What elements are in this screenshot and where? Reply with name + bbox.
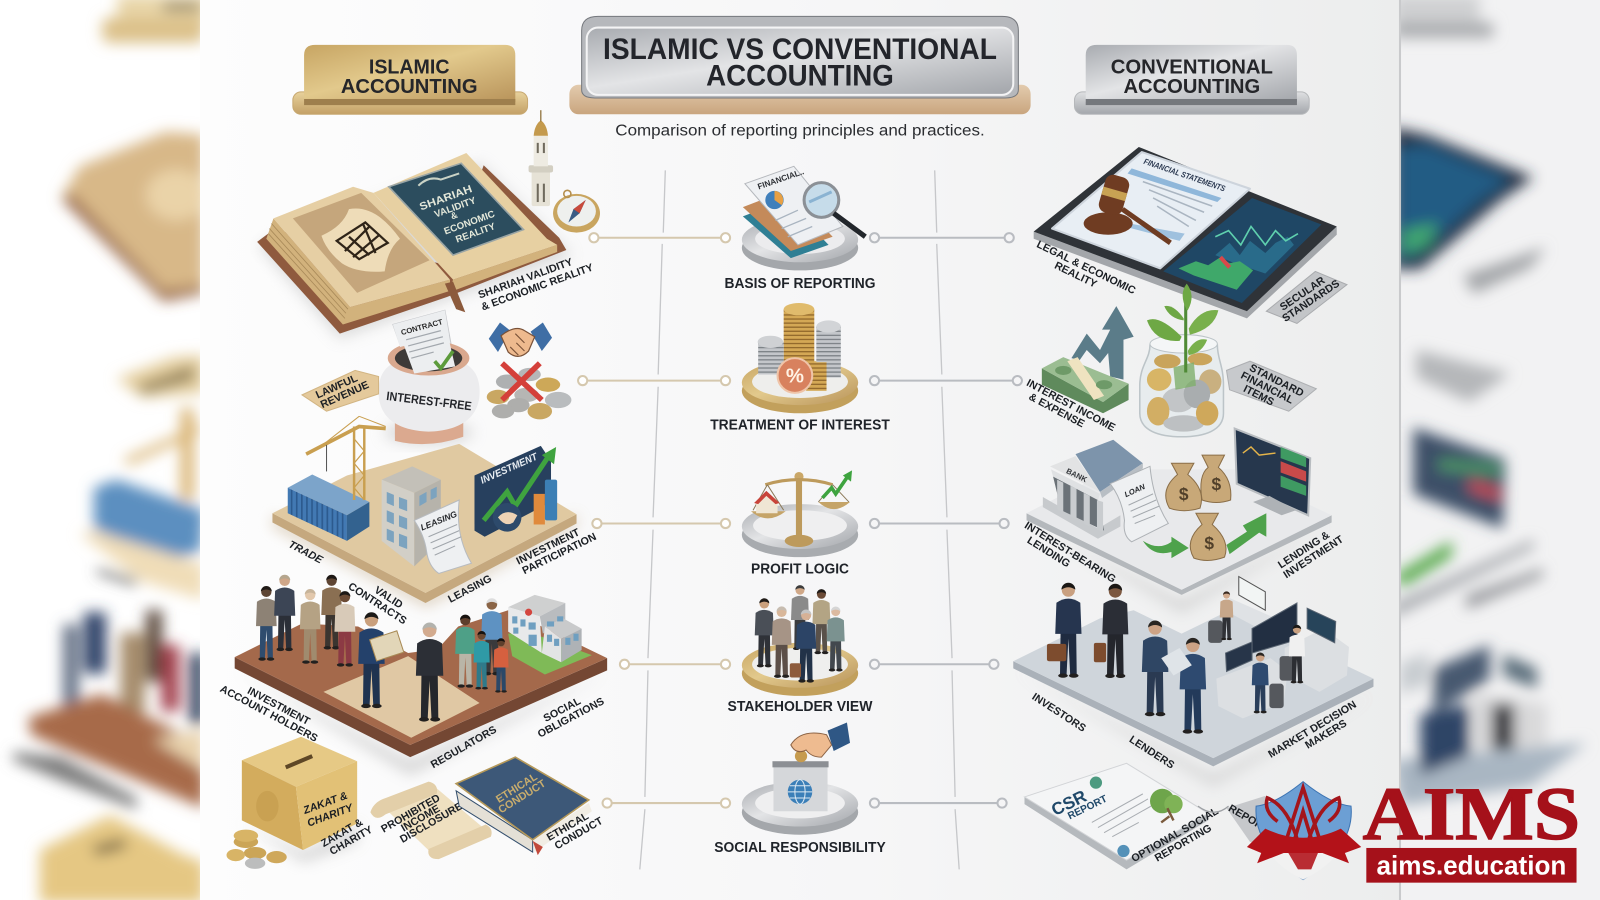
tag: secular standards [1266,269,1347,325]
panel: stakeholders wooden platform [235,575,607,776]
labels: investors row: MARKET DECISION [1266,698,1359,761]
tag: optional report tag: REPORT [1226,802,1271,835]
label: optional social reporting: OPTIONAL SOCIAL [1129,805,1221,865]
label: Shariah validity: & ECONOMIC REALITY [480,262,595,313]
panel: bank lending platform [1027,429,1332,612]
icon: zakat and charity box: ZAKAT & [301,790,349,817]
labels: stakeholder row: ACCOUNT HOLDERS [218,683,320,745]
connector: row 4 right [870,660,998,669]
logo: web address banner: aims.education [1377,850,1566,880]
icon: shipping container [288,474,369,541]
panel: bank lending platform: $ [1212,474,1222,494]
tag: lawful revenue [302,369,379,411]
tag: lawful revenue: LAWFUL [314,372,360,401]
icon: bank building: BANK [1065,466,1089,484]
icon: leasing contract [414,500,471,573]
label: ethical conduct: ETHICAL [545,810,591,844]
tag: standard financial items: FINANCIAL [1239,370,1296,407]
panel: investors and market desks platform [1013,577,1373,786]
labels: lending row: INTEREST-BEARING [1022,520,1118,586]
icon: seedling in coin jar [1140,284,1223,437]
icon: loan scroll: LOAN [1123,482,1147,499]
label: social responsibility: SOCIAL RESPONSIBILITY [714,840,886,856]
connector: row 1 right [870,233,1014,242]
panel: trade and leasing platform [272,416,577,606]
label: legal and economic reality: REALITY [1052,260,1099,291]
labels: investors row: INVESTORS [1030,691,1088,735]
icon: interest-free pot with contract: CONTRACT [400,317,444,337]
labels: stakeholder row [218,673,606,771]
labels: stakeholder row: REGULATORS [429,724,499,771]
label: Shariah validity: SHARIAH VALIDITY [477,256,574,302]
label: zakat and charity: ZAKAT & [319,816,365,850]
icon: prohibited income disclosure scroll: PROHIBITED [379,792,443,835]
panel: blurred right backdrop [1393,0,1600,900]
icon: bank building [1043,440,1143,539]
labels: trade row: TRADE [286,538,325,567]
labels: lending row: LENDING [1025,534,1072,570]
labels: investors row [1030,691,1365,772]
icon: loan scroll [1110,466,1168,542]
tag: standard financial items [1227,360,1316,419]
icon: minaret [529,110,553,206]
icon: office building [382,466,441,566]
people: investment account holders [256,575,355,667]
labels: trade row: INVESTMENT [514,526,582,568]
title plaque: ACCOUNTING [706,60,894,93]
label: stakeholder view: STAKEHOLDER VIEW [728,699,872,715]
connector: row 1 left [589,233,730,242]
people: investors and lenders [1047,583,1206,734]
title plaque: ISLAMIC VS CONVENTIONAL [603,33,997,66]
icon: crossed-out coins [487,363,571,419]
icon: hospital building [508,595,582,662]
tag: optional report tag [1198,796,1276,847]
heading: Conventional accounting plaque [1074,45,1309,114]
icon: CSR report stack: REPORT [1066,793,1110,822]
icon: trading desks [1208,577,1349,718]
icon: open book of Shariah validity: REALITY [454,221,498,246]
label: zakat and charity: CHARITY [328,824,375,858]
icon: ethical conduct book: ETHICAL [494,771,540,806]
icon: CSR report stack: CSR [1048,786,1090,820]
labels: trade row: LEASING [446,573,494,606]
labels: lending row: INVESTMENT [1281,533,1346,581]
icon: prohibited income disclosure scroll: INCOME [399,803,442,835]
logo: AIMS shield [1247,782,1361,880]
icon: investment board [474,446,557,537]
heading: Islamic accounting plaque: ACCOUNTING [341,76,478,98]
icon: ethical conduct book [456,757,592,855]
panel: bank lending platform: $ [1204,533,1214,553]
heading: Islamic accounting plaque: ISLAMIC [369,56,450,78]
labels: lending row [1016,520,1346,595]
icon: interest-free pot with contract [379,310,480,445]
icon: green arrows [1143,513,1266,558]
panel: central comparison sheet [200,0,1400,900]
icon: open book of Shariah validity: SHARIAH [418,183,474,213]
labels: stakeholder row: OBLIGATIONS [536,695,606,741]
icon: zakat and charity box: CHARITY [306,802,355,830]
label: optional social reporting: REPORTING [1153,822,1214,864]
label: treatment of interest: TREATMENT OF INTEREST [710,418,890,434]
people: regulators [358,612,443,722]
heading: Conventional accounting plaque: CONVENTIONAL [1111,56,1273,78]
icon: prohibited income disclosure scroll: DISCLOSURE [398,800,465,846]
labels: trade row: PARTICIPATION [520,531,599,577]
labels: stakeholder row: INVESTMENT [245,685,312,728]
tag: lawful revenue: REVENUE [319,379,371,411]
icon: trading monitor [1235,429,1310,515]
labels: investors row: LENDERS [1127,734,1176,772]
icon: open book of Shariah validity: & [449,210,459,221]
icon: tablet with gavel and financial statements [1034,147,1337,318]
icon: crane [306,416,386,500]
labels: trade row: CONTRACTS [346,581,409,627]
icon: zakat and charity box [242,737,357,862]
tag: standard financial items: ITEMS [1241,383,1276,409]
labels: stakeholder row: SOCIAL [542,695,583,725]
connector: row 2 left [578,376,730,385]
title plaque [569,16,1031,114]
tag: secular standards: STANDARDS [1280,278,1342,325]
icon: tablet with gavel and financial statements: FINANCIAL STATEMENTS [1143,157,1227,194]
label: ethical conduct: CONDUCT [553,815,605,852]
labels: lending row: LENDING & [1276,529,1332,571]
icon: rising arrow [1071,306,1134,380]
heading: Conventional accounting plaque: ACCOUNTING [1123,76,1260,98]
icon: ethical conduct book: CONDUCT [496,777,548,816]
icon: compass [553,190,600,233]
people: community [455,598,509,693]
tag: standard financial items: STANDARD [1247,362,1306,400]
labels: trade row: VALID [372,584,405,611]
icon: prohibited income disclosure scroll [370,782,492,859]
icon: gold coins [227,830,287,869]
logo: AIMS wordmark: AIMS [1363,773,1580,856]
connector: row 3 left [592,519,730,528]
icon: open book of Shariah validity: ECONOMIC [443,209,496,237]
panel: bank lending platform: $ [1179,484,1189,504]
subtitle: Comparison of reporting principles and practices. [615,123,985,140]
icon: investment board: INVESTMENT [479,451,540,487]
connector: row 5 right [870,798,1007,808]
label: profit logic: PROFIT LOGIC [751,561,849,577]
label: legal and economic reality: LEGAL & ECONOMIC [1035,239,1138,297]
connector: row 2 right [870,376,1022,385]
label: basis of reporting: BASIS OF REPORTING [724,276,876,292]
icon: documents on silver pedestal [742,166,865,270]
icon: money bags [1166,455,1231,560]
labels: investors row: MAKERS [1303,717,1349,752]
icon: handshake [489,322,552,356]
icon: leasing contract: LEASING [419,509,459,533]
icon: documents on silver pedestal: FINANCIAL.. [756,167,805,191]
tag: secular standards: SECULAR [1278,274,1328,313]
icon: open book of Shariah validity: VALIDITY [433,195,478,220]
connector: row 4 left [620,660,730,669]
icon: interest-free pot with contract: INTEREST-FREE [386,389,472,413]
icon: stakeholders on gold pedestal [742,585,858,696]
icon: coin stacks on gold pedestal: % [786,366,804,388]
heading: Islamic accounting plaque [293,45,528,114]
icon: money stacks [1042,357,1129,413]
icon: coin stacks on gold pedestal [742,303,858,413]
icon: donation hand and globe box on silver pedestal [742,722,858,835]
labels: trade row [286,521,599,627]
connector: row 5 left [603,798,730,808]
label: interest income and expense: & EXPENSE [1027,391,1086,430]
label: interest income and expense: INTEREST INCOME [1024,377,1117,434]
icon: balance scale on silver pedestal [742,470,858,557]
connector: row 3 right [870,519,1009,528]
icon: open book of Shariah validity [257,153,571,339]
icon: CSR report stack [1024,763,1208,869]
panel: blurred left backdrop [13,0,209,900]
